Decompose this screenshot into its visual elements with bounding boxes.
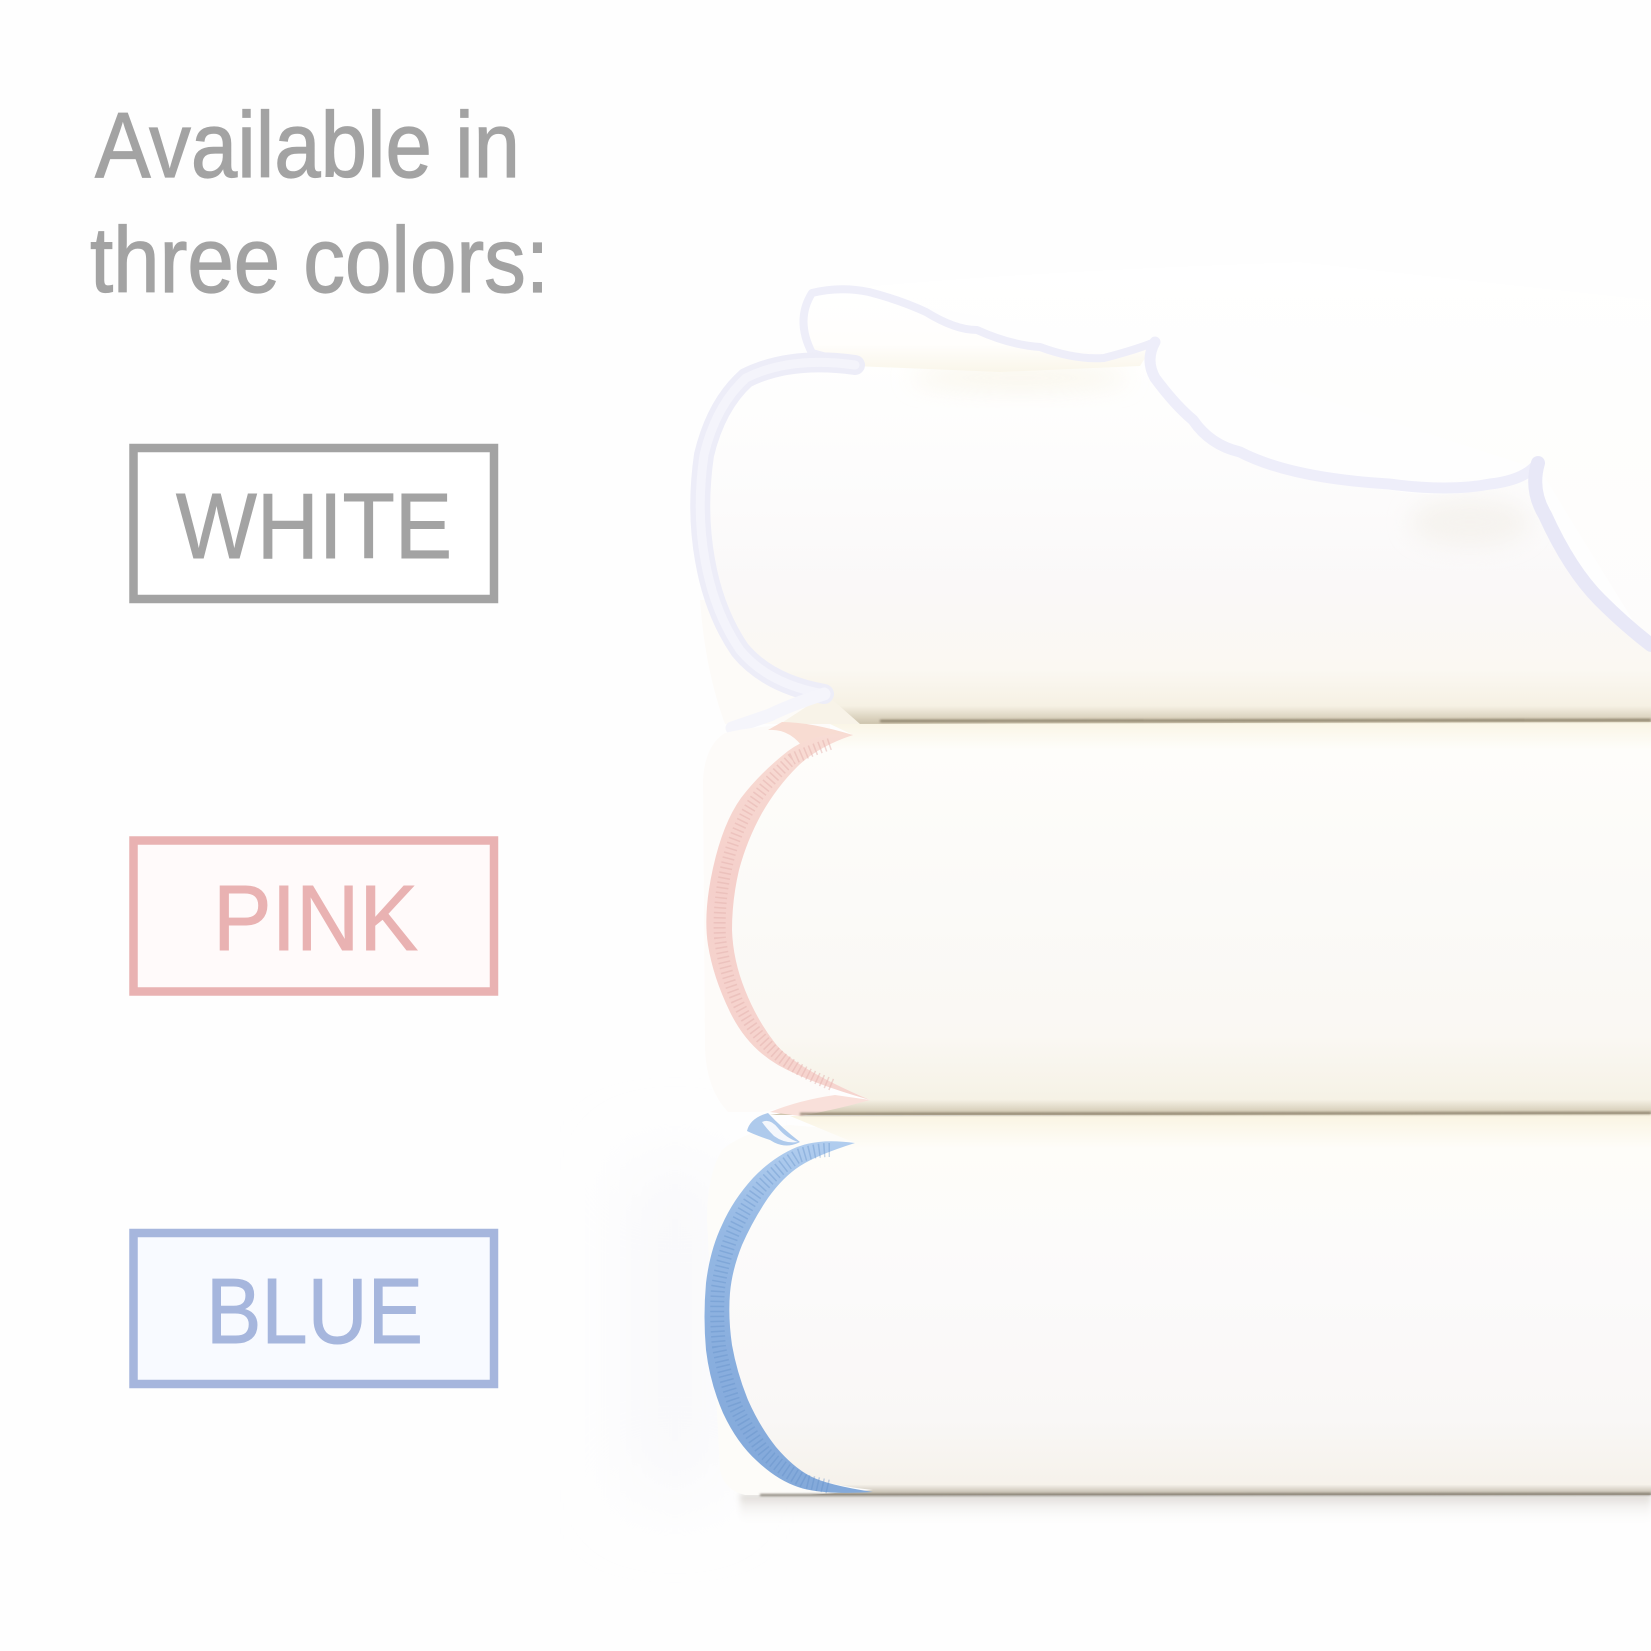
color label: blue (134, 1233, 494, 1384)
top sheet: white embroidered scallops (700, 289, 1651, 728)
top sheet: front fold (700, 345, 1651, 724)
soft shadow left of stack (640, 1170, 710, 1490)
base line of stack (760, 1494, 1651, 1495)
heading (90, 93, 549, 312)
blue embroidered edge (704, 1141, 873, 1493)
bottom sheet: side panel (707, 1125, 850, 1495)
bottom sheet: front fold (729, 1114, 1651, 1495)
photo: stack of folded sheets (640, 262, 1651, 1528)
color label: pink (134, 840, 494, 992)
pink embroidered edge (706, 734, 870, 1100)
top sheet: side panel (700, 600, 830, 724)
heading: three colors: (90, 208, 549, 312)
color label: white (134, 448, 494, 599)
middle sheet: side panel (703, 724, 830, 1112)
color label: white: WHITE (176, 474, 452, 578)
blue loop at top of bottom sheet (747, 1113, 800, 1146)
pink loop at top of middle sheet (768, 722, 853, 750)
top sheet: upper surface (812, 262, 1651, 650)
fold line: middle and bottom sheets (800, 1113, 1651, 1114)
color label: blue: BLUE (206, 1259, 423, 1363)
fold line: top and middle sheets (880, 720, 1651, 721)
pink tail at bottom of middle sheet (770, 1095, 870, 1116)
heading: Available in (95, 93, 520, 197)
ground shadow (740, 1494, 1651, 1528)
top sheet: turned-up flap (804, 289, 1155, 372)
color label: pink: PINK (213, 866, 418, 970)
middle sheet: front fold (732, 722, 1651, 1115)
